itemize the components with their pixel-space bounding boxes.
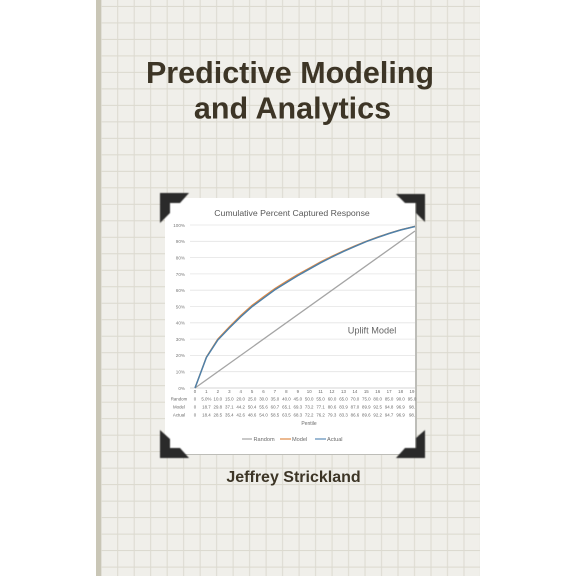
corner: bottom left [160,430,189,458]
table row: actual: 79.3 [328,412,337,417]
table header row: 6 [262,389,265,394]
table header row: 19 [410,389,415,394]
table header row: 12 [330,389,335,394]
table row: actual: 72.2 [305,412,314,417]
table header row: 8 [285,389,288,394]
table row: actual: 86.6 [351,412,360,417]
table row: model: 87.0 [351,404,360,410]
table row: random: 85.0 [385,397,394,402]
table row: actual: 63.5 [282,412,291,417]
y axis labels [173,223,185,391]
table row: random: 55.0 [316,397,325,402]
annotation: uplift model: Uplift Model [348,326,396,336]
table row: model: 92.5 [373,404,383,410]
table row: model: 44.2 [236,404,246,410]
y axis labels: 30% [176,337,185,342]
table row: actual: 54.0 [259,412,268,417]
table row: random: 65.0 [339,397,348,402]
table row: actual: 35.4 [225,412,234,417]
y axis labels: 50% [176,304,185,310]
table header row: 0 [194,389,197,394]
table row: random: 50.0 [305,397,314,402]
table row: actual: 83.3 [339,412,348,417]
table row: random: 40.0 [282,397,291,402]
table row: model [173,404,415,410]
table header row: 2 [217,389,220,394]
table row: actual: 68.3 [294,412,303,417]
table row: random: 75.0 [362,397,371,402]
table row: actual: 76.2 [316,412,325,417]
table row: model: 50.4 [248,404,257,410]
table header row: 15 [364,389,369,394]
table row: random: Random [171,397,188,402]
table row: model: 65.1 [282,404,291,410]
table row: actual: 28.5 [214,412,223,417]
table header row: 17 [387,389,392,394]
axis label: pentile: Pentile [301,421,317,427]
title [146,56,434,125]
table header row: 10 [307,389,312,394]
table row: model: 98. [409,404,415,410]
legend: Random [254,437,275,443]
author: Jeffrey Strickland [226,469,361,486]
table header row: 1 [205,389,208,394]
table row: random: 80.0 [373,397,383,402]
table row: model: 55.6 [259,404,268,410]
y axis labels: 10% [176,370,185,374]
table row: model: 89.9 [362,404,371,410]
table header row: 5 [251,389,254,394]
table row: model: 83.9 [339,404,348,410]
table row: model: 29.8 [214,404,223,410]
table row: model: Model [173,404,185,410]
title: Predictive Modeling [146,56,434,90]
photo corner mounts [160,193,425,458]
table header row: 9 [297,389,300,394]
table header row: 11 [318,389,323,394]
table row: actual: 96.9 [396,412,405,417]
table row: random: 5.0% [201,397,211,402]
legend [242,437,343,443]
table header row: 16 [375,389,381,394]
table row: actual: 92.2 [373,412,383,417]
table row: model: 0 [194,404,197,410]
corner: top right [396,194,425,222]
table row: actual: 89.6 [362,412,371,417]
y axis labels: 80% [176,256,185,260]
line: model [195,226,415,388]
data table [171,389,417,417]
table header row: 14 [352,389,358,394]
table row: model: 60.7 [271,404,280,410]
table header row: 13 [341,389,346,394]
table row: random: 90.0 [396,397,405,402]
book cover background [96,0,480,576]
table row: random: 20.0 [236,397,246,402]
table row: model: 77.1 [316,404,325,410]
line: actual [195,226,415,388]
table header row [194,389,415,394]
table row: model: 73.2 [305,404,314,410]
chart [171,208,417,443]
table row: random: 95.0 [408,397,417,402]
table row: random: 70.0 [351,397,360,402]
table row: actual: 94.7 [385,412,394,417]
table row: model: 69.3 [294,404,303,410]
table row: random: 0 [194,397,197,402]
table row: random: 25.0 [248,397,257,402]
line: random [195,231,415,388]
table row: actual: 0 [194,412,197,417]
title: and Analytics [194,91,391,125]
table header row: 3 [228,389,231,394]
table row: model: 80.6 [328,404,337,410]
corner: top left [160,193,189,223]
table row: actual [173,412,415,417]
table row: random [171,397,417,402]
table row: random: 45.0 [294,397,303,402]
legend: Model [292,437,307,443]
table row: random: 10.0 [214,397,223,402]
table row: model: 37.1 [225,404,234,410]
corner: bottom right [396,430,425,458]
photo frame [165,198,417,455]
table row: model: 18.7 [202,404,211,410]
table row: actual: Actual [173,412,185,417]
table row: random: 60.0 [328,397,337,402]
table row: random: 15.0 [225,397,234,402]
table row: model: 96.9 [396,404,405,410]
table header row: 4 [239,389,242,394]
y axis labels: 100% [173,223,185,228]
table header row: 18 [398,389,404,394]
table row: actual: 58.5 [271,412,280,417]
table row: random: 30.0 [259,397,268,402]
table row: actual: 18.4 [202,412,211,417]
gridlines [190,225,415,388]
y axis labels: 20% [176,353,185,358]
table row: actual: 48.6 [248,412,257,417]
table header row: 7 [274,389,277,394]
legend: Actual [327,437,343,443]
table row: model: 94.8 [385,404,394,410]
y axis labels: 70% [176,272,185,277]
chart title: Cumulative Percent Captured Response [214,208,370,218]
y axis labels: 0% [178,386,185,391]
table row: random: 35.0 [271,397,280,402]
y axis labels: 60% [176,288,185,293]
table row: actual: 98. [409,412,415,417]
y axis labels: 90% [176,239,185,244]
y axis labels: 40% [176,320,185,326]
table row: actual: 42.6 [236,412,246,417]
